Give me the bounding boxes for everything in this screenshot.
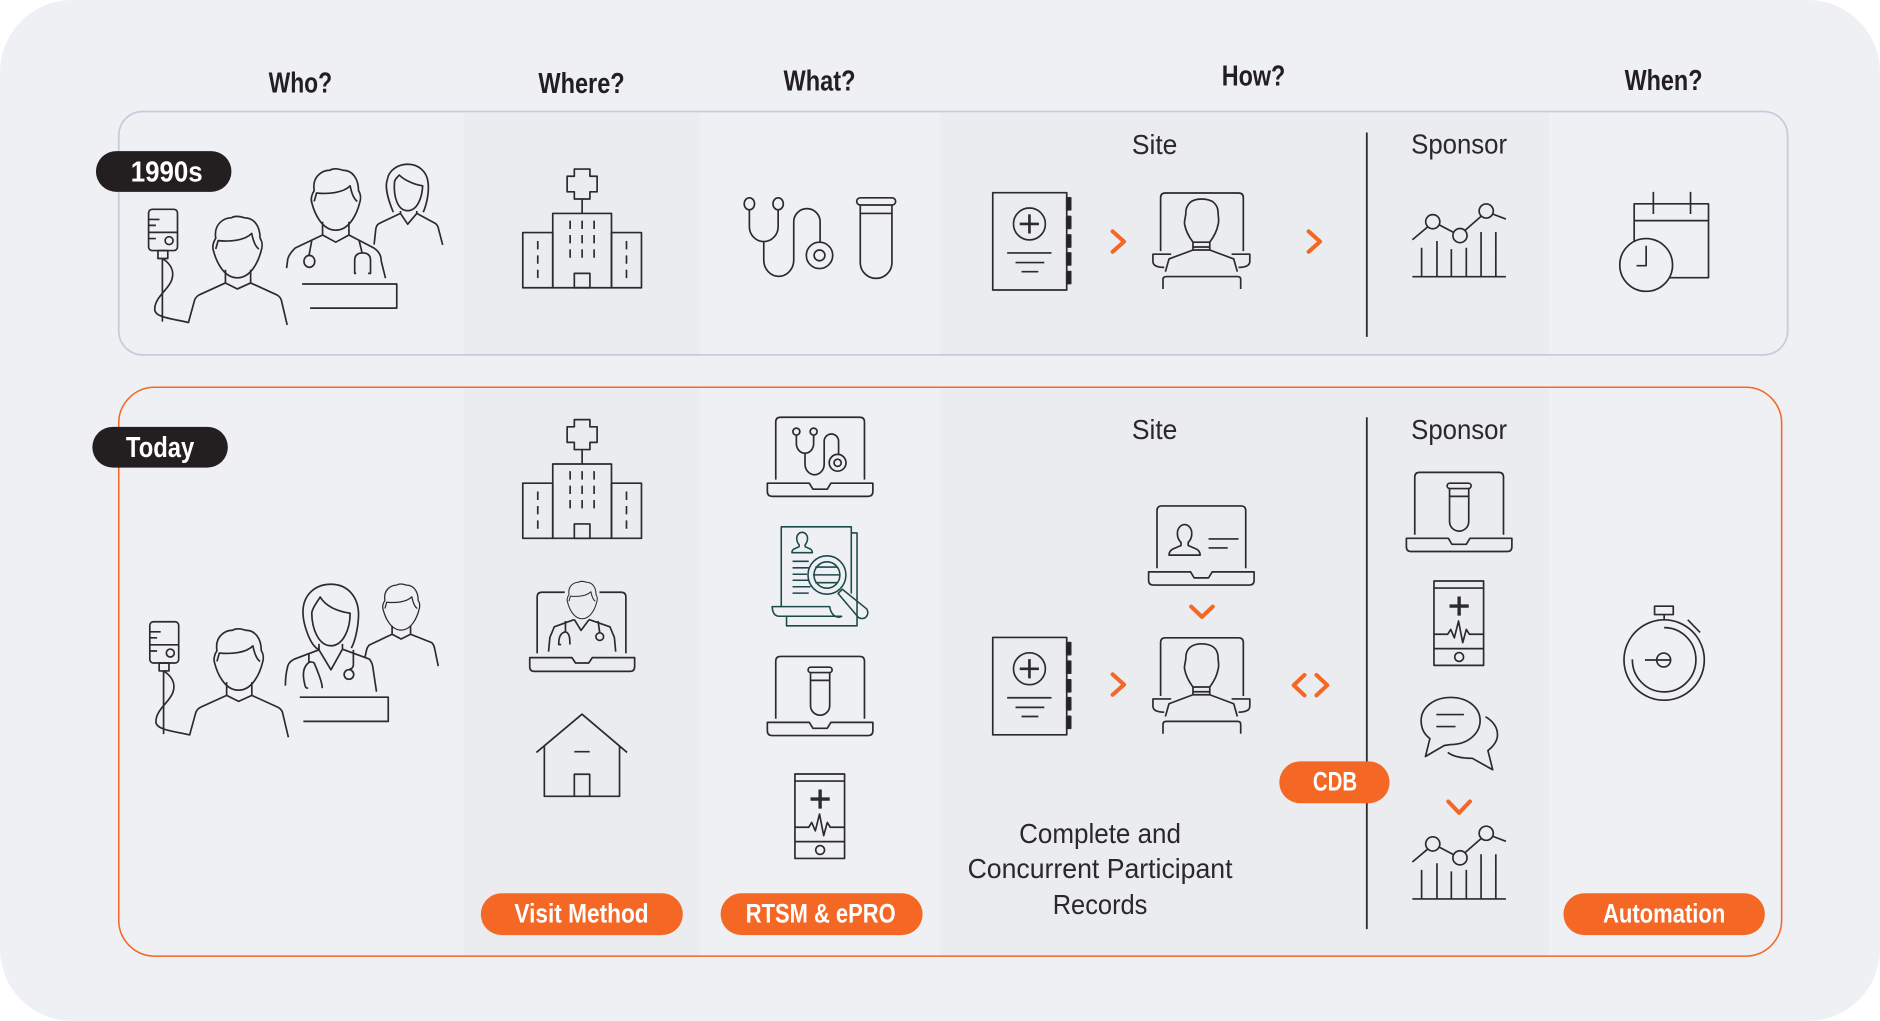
people: patient with IV, doctor and nurse	[149, 164, 443, 325]
label: Site: Site	[1132, 413, 1177, 445]
icon: reviewer at screen	[1153, 193, 1250, 289]
column heading: Who?: Who?	[269, 67, 332, 99]
badge: 1990s	[96, 151, 231, 192]
arrow: bubbles down to chart	[1448, 801, 1470, 813]
arrow: binder to reviewer	[1113, 231, 1124, 252]
icon: analytics chart	[1412, 204, 1506, 277]
column heading: How?: How?	[1222, 61, 1285, 93]
icon: test tube on laptop	[767, 656, 873, 736]
shaded column bands	[464, 113, 1549, 956]
icon: document with magnifier	[772, 527, 868, 626]
icon: medical phone	[1434, 581, 1484, 665]
label: Sponsor: Sponsor	[1411, 413, 1507, 445]
icon: stopwatch	[1624, 606, 1704, 700]
pill: Visit Method: Visit Method	[514, 899, 649, 929]
text: complete and concurrent participant records: Concurrent Participant	[968, 852, 1233, 884]
icon: medical phone	[795, 774, 845, 858]
badge: Today	[92, 427, 228, 468]
icon: hospital	[523, 420, 641, 538]
people: patient with IV, doctor and colleague	[150, 584, 438, 737]
pill: CDB	[1279, 761, 1390, 803]
icon: medical binder	[993, 193, 1071, 290]
label: Sponsor: Sponsor	[1411, 127, 1507, 159]
arrow: reviewer to sponsor	[1309, 231, 1320, 252]
icon: speech bubbles	[1421, 697, 1497, 770]
icon: telehealth doctor on laptop	[530, 581, 635, 671]
pill: Automation	[1563, 893, 1765, 935]
column heading: When?: When?	[1625, 65, 1703, 97]
icon: hospital	[523, 169, 641, 288]
icon: stethoscope on laptop	[767, 417, 873, 496]
text: complete and concurrent participant records	[968, 817, 1233, 920]
pill: CDB: CDB	[1313, 767, 1357, 797]
panel: Today	[119, 387, 1782, 956]
badge: 1990s: 1990s	[131, 157, 203, 189]
icon: reviewer at screen	[1153, 638, 1250, 734]
divider	[1366, 132, 1368, 337]
icon: test tube	[857, 198, 896, 278]
pill: RTSM & ePRO: RTSM & ePRO	[746, 899, 896, 929]
text: complete and concurrent participant records: Complete and	[1019, 817, 1181, 849]
icon: calendar with clock	[1620, 192, 1709, 291]
pill: RTSM & ePRO	[721, 893, 923, 935]
icon: medical binder	[993, 637, 1071, 735]
icon: stethoscope	[744, 198, 833, 276]
pill: Visit Method	[481, 893, 683, 935]
badge: Today: Today	[126, 432, 194, 464]
pill: Automation: Automation	[1603, 899, 1725, 929]
column heading: What?: What?	[784, 66, 855, 98]
label: Site: Site	[1132, 128, 1177, 160]
text: complete and concurrent participant records: Records	[1053, 888, 1147, 920]
arrow: profile down to reviewer	[1191, 607, 1213, 617]
icon: test tube on laptop	[1406, 472, 1512, 552]
icon: house	[536, 714, 627, 796]
column heading: Where?: Where?	[538, 68, 625, 100]
arrow: bidirectional to CDB	[1294, 675, 1327, 695]
icon: analytics chart	[1412, 826, 1506, 899]
icon: profile on laptop	[1149, 506, 1254, 585]
divider	[1366, 417, 1368, 929]
arrow: binder to reviewer	[1113, 674, 1124, 695]
panel: 1990s	[119, 111, 1788, 355]
